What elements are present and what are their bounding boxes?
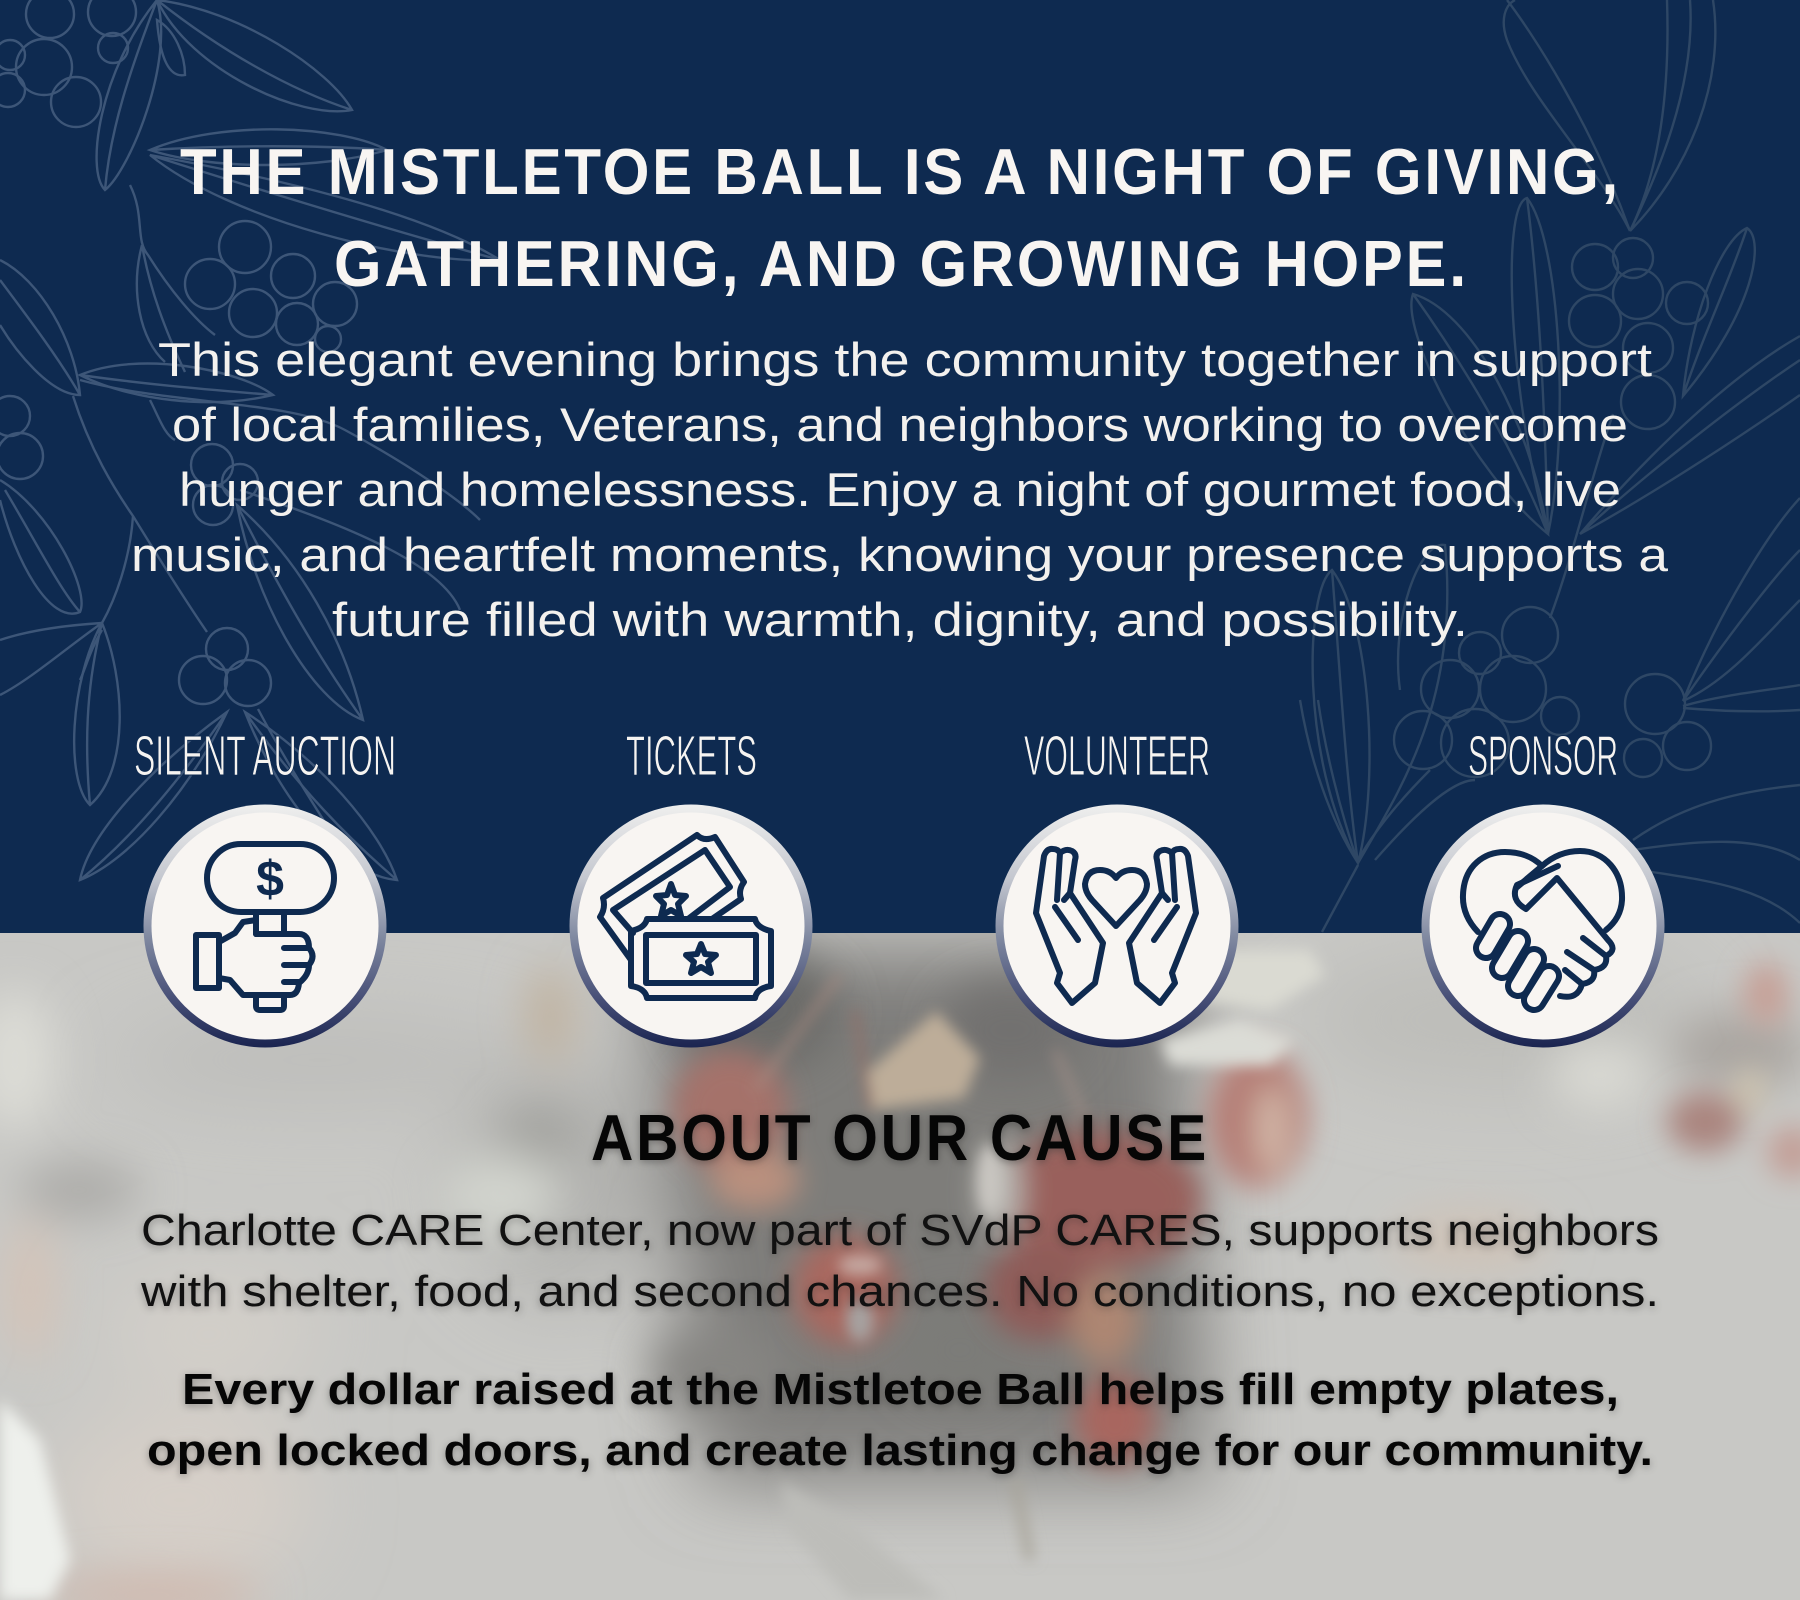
badge inner: tickets — [578, 812, 804, 1040]
intro paragraph: music, and heartfelt moments, knowing your presence supports a — [131, 528, 1669, 581]
intro paragraph: hunger and homelessness. Enjoy a night of gourmet food, live — [179, 463, 1621, 516]
badge inner: silent auction — [152, 812, 378, 1040]
icon: hand holding paddle — [196, 844, 334, 1010]
closing statement: open locked doors, and create lasting change for our community. — [147, 1426, 1653, 1475]
badge circle: silent auction — [144, 804, 386, 1048]
icon: hand holding paddle: $ — [256, 851, 284, 907]
item: tickets — [570, 724, 812, 1048]
icon: hands holding heart — [1036, 849, 1196, 1003]
item: sponsor — [1422, 724, 1664, 1048]
item: volunteer — [996, 724, 1238, 1048]
icon: heart handshake — [1463, 851, 1622, 1000]
intro paragraph — [131, 333, 1669, 646]
intro paragraph: This elegant evening brings the community together in support — [158, 333, 1652, 386]
cause paragraph: with shelter, food, and second chances. No conditions, no exceptions. — [140, 1267, 1659, 1316]
item: silent auction — [134, 724, 396, 1048]
icon: two tickets — [600, 835, 771, 998]
label: silent auction: SILENT AUCTION — [134, 724, 396, 788]
title: THE MISTLETOE BALL IS A NIGHT OF GIVING, — [180, 135, 1621, 208]
closing statement — [147, 1365, 1653, 1475]
botanical line art: left — [0, 0, 500, 880]
badge circle: sponsor — [1422, 804, 1664, 1048]
title — [180, 135, 1621, 300]
label: sponsor: SPONSOR — [1468, 724, 1618, 788]
label: volunteer: VOLUNTEER — [1024, 724, 1210, 788]
cause paragraph: Charlotte CARE Center, now part of SVdP CARES, supports neighbors — [141, 1206, 1659, 1255]
badge circle: volunteer — [996, 804, 1238, 1048]
botanical line art: right — [1300, 0, 1800, 932]
label: tickets: TICKETS — [626, 724, 757, 788]
navy upper panel — [0, 0, 1800, 934]
lower photo panel, blurred berry branch under a pale overlay — [0, 933, 1800, 1600]
badge inner: sponsor — [1430, 812, 1656, 1040]
title: GATHERING, AND GROWING HOPE. — [334, 227, 1469, 300]
badge circle: tickets — [570, 804, 812, 1048]
badge inner: volunteer — [1004, 812, 1230, 1040]
closing statement: Every dollar raised at the Mistletoe Ball helps fill empty plates, — [182, 1365, 1619, 1414]
intro paragraph: future filled with warmth, dignity, and possibility. — [332, 593, 1468, 646]
heading: about our cause: ABOUT OUR CAUSE — [591, 1101, 1209, 1174]
cause paragraph — [140, 1206, 1659, 1316]
intro paragraph: of local families, Veterans, and neighbors working to overcome — [172, 398, 1628, 451]
